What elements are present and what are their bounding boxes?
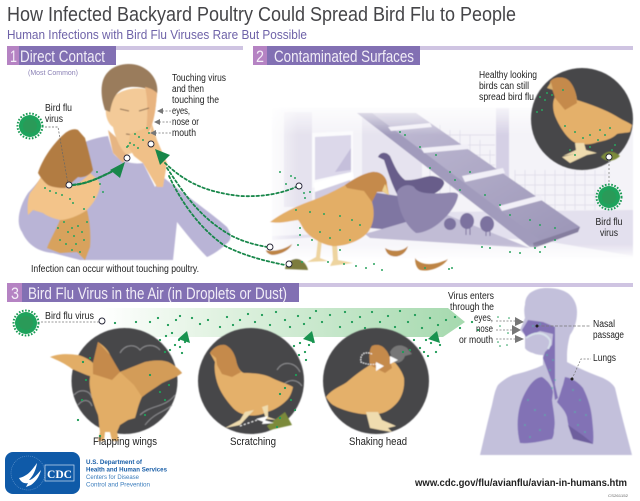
logo: HHS and CDC: CDC: [47, 467, 72, 481]
callout: lungs: [570, 353, 616, 380]
callout: lungs: Lungs: [593, 353, 616, 364]
nest box: [312, 131, 354, 200]
floor: [272, 210, 633, 258]
section 3 heading: Bird Flu Virus in the Air (in Droplets or Dust): [28, 284, 287, 303]
dashed leader: virus to hen: [45, 127, 68, 184]
feathers: [266, 244, 448, 271]
dashed leader: circle to virus: [608, 160, 610, 184]
callout: healthy looking birds: Healthy looking: [479, 70, 537, 81]
right lung: [557, 377, 593, 444]
callout: touching virus: mouth: [172, 128, 196, 139]
callout: nasal passage: passage: [593, 330, 624, 341]
arrows: eyes nose mouth pointers: [150, 108, 171, 136]
face shadow: [145, 87, 157, 134]
coop post: [496, 108, 509, 200]
coop back wall panel: [362, 118, 422, 208]
callout: virus enters: or mouth: [459, 335, 493, 346]
callout: touching virus: and then: [172, 84, 204, 95]
chicks: [444, 213, 494, 236]
airborne virus particles: [78, 311, 478, 436]
left wing: [50, 354, 93, 377]
infection note: Infection can occur without touching poultry.: [31, 264, 199, 275]
dust curls: [74, 346, 175, 425]
agency name: Control and Prevention: [86, 482, 150, 488]
section 3 heading: [7, 283, 633, 303]
label: shaking head: Shaking head: [349, 436, 407, 448]
section 3 heading: 3: [11, 284, 19, 303]
most common note: (Most Common): [28, 70, 78, 77]
hen upper body: [38, 129, 93, 188]
oral cavity arc: [526, 333, 550, 349]
callout: virus enters: eyes,: [474, 313, 493, 324]
section 1 heading: 1: [10, 47, 17, 66]
hair: [102, 64, 157, 112]
panel: direct contact man: [19, 64, 231, 260]
virus particles in airway: [525, 324, 586, 437]
marker rings on contact path: [66, 141, 612, 267]
left lung: [518, 377, 555, 443]
silhouette: [480, 288, 632, 455]
panel: scratching circle: [198, 328, 304, 434]
eyes and mouth: [120, 108, 149, 135]
pale coop wall: [272, 108, 633, 258]
front purple hen: [397, 185, 458, 233]
ramp shadow floor: [365, 212, 530, 248]
nasal passage and trachea: [522, 320, 558, 400]
label: bird flu virus air: Bird flu virus: [45, 311, 94, 322]
shadow behind hens: [370, 192, 412, 232]
hen held: [28, 129, 100, 260]
droppings: [285, 259, 308, 270]
top and side fade: [262, 100, 633, 135]
hen lower body: [47, 210, 90, 260]
callout: virus enters: Virus enters: [448, 291, 494, 302]
label: bird flu virus left: [45, 103, 72, 125]
agency name: U.S. Department of: [86, 459, 143, 466]
arrows: virus entering: [496, 317, 524, 346]
main hen: [270, 172, 389, 266]
floor near white: [272, 234, 633, 258]
sweater: [19, 136, 231, 260]
body: [90, 342, 182, 441]
section 2 heading: 2: [256, 47, 264, 66]
label: bird flu virus right: Bird flu: [596, 217, 622, 228]
callout: touching virus: [172, 73, 226, 139]
callout: touching virus: Touching virus: [172, 73, 226, 84]
logo: HHS and CDC: [5, 452, 80, 494]
label: scratching: Scratching: [230, 436, 276, 448]
panel: healthy bird circle: [531, 68, 633, 170]
callout: virus enters: [448, 291, 494, 346]
section 2 heading: Contaminated Surfaces: [274, 47, 414, 66]
callout: touching virus: touching the: [172, 95, 219, 106]
agency name: Centers for Disease: [86, 474, 139, 481]
green arrowheads up: [178, 331, 440, 343]
agency name: [86, 459, 167, 488]
callout: nasal passage: Nasal: [593, 319, 615, 330]
label: bird flu virus left: virus: [45, 114, 63, 125]
icon: bird flu virus (direct contact): [18, 114, 42, 138]
callout: nasal passage: [536, 319, 624, 341]
document id: CS261152: [608, 493, 629, 498]
label: flapping wings: Flapping wings: [93, 436, 157, 448]
panel: flapping wings circle: [50, 328, 182, 441]
icon: bird flu virus (healthy bird): [596, 184, 622, 210]
title: How Infected Backyard Poultry Could Spread Bird Flu to People: [7, 4, 516, 26]
section 1 heading: Direct Contact: [20, 47, 105, 66]
contamination dots: direct contact and surfaces: [45, 90, 615, 270]
callout: virus enters: nose: [476, 324, 493, 335]
icon: bird flu virus (air): [14, 310, 38, 336]
label: bird flu virus left: Bird flu: [45, 103, 72, 114]
ramp rungs: [388, 123, 543, 211]
transmission paths: green dashed arrows: [72, 149, 296, 265]
callout: healthy looking birds: spread bird flu: [479, 92, 534, 103]
label: bird flu virus right: virus: [600, 228, 618, 239]
callout: touching virus: nose or: [172, 117, 200, 128]
agency name: Health and Human Services: [86, 466, 167, 474]
callout: healthy looking birds: [479, 70, 537, 103]
panel: contaminated surfaces scene: [262, 100, 633, 271]
ramp: [357, 113, 580, 247]
callout: healthy looking birds: birds can still: [479, 81, 529, 92]
face: [106, 88, 157, 155]
airborne virus band: [100, 308, 465, 337]
hand holding hen: [28, 173, 100, 220]
wire mesh: [430, 125, 610, 210]
coop side wall: [284, 112, 312, 207]
label: bird flu virus right: [596, 217, 622, 239]
website url: www.cdc.gov/flu/avianflu/avian-in-humans.htm: [414, 478, 627, 489]
panel: shaking head circle: [323, 328, 429, 434]
back purple hen: [378, 153, 444, 196]
neck: [108, 130, 130, 163]
panel: human respiratory figure: [480, 288, 632, 455]
callout: virus enters: through the: [450, 302, 494, 313]
subtitle: Human Infections with Bird Flu Viruses Rare But Possible: [7, 27, 307, 42]
section 1 heading: [7, 46, 243, 66]
callout: touching virus: eyes,: [172, 106, 190, 117]
section 2 heading: [253, 46, 633, 66]
hand and forearm: [128, 124, 167, 187]
